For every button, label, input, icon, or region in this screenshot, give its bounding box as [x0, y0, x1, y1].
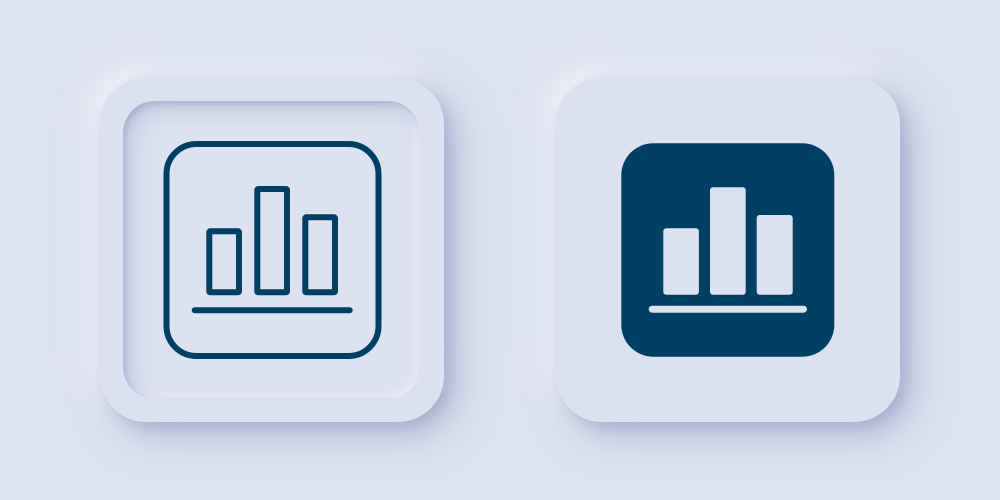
baseline: [649, 306, 807, 313]
icon: solid bar chart: [621, 143, 834, 357]
right bar: [757, 215, 793, 295]
left bar: [663, 228, 699, 295]
panel: solid icon tile: [556, 78, 900, 422]
middle bar outline: [257, 189, 287, 292]
icon: outlined bar chart: [164, 141, 382, 359]
icon frame: [166, 144, 378, 356]
solid icon background: [621, 143, 834, 357]
panel: outline icon tile: [100, 78, 444, 422]
right bar outline: [305, 217, 335, 292]
left bar outline: [209, 231, 239, 292]
baseline: [192, 307, 353, 313]
recessed inner well: [123, 101, 420, 399]
middle bar: [710, 187, 746, 295]
